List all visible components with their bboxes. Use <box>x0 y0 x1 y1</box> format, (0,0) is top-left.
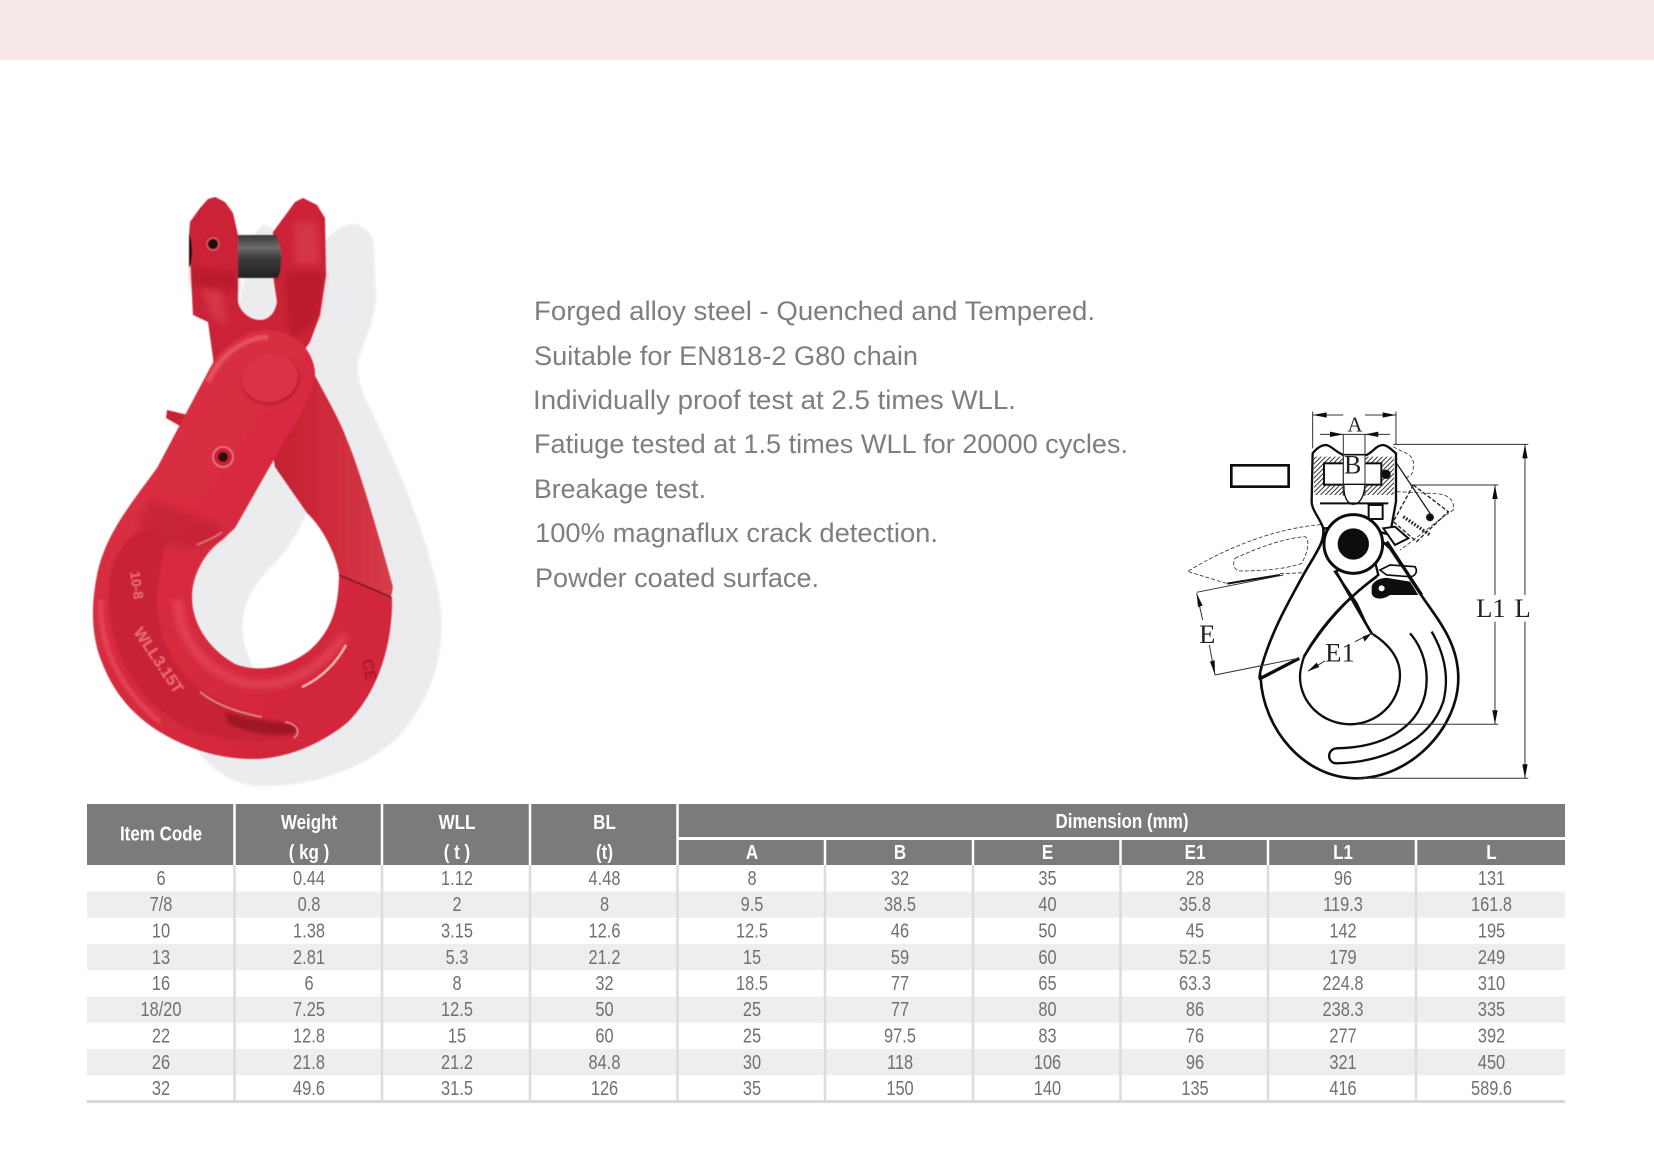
tilted lever hatching <box>1393 463 1448 542</box>
hook outline <box>1260 528 1458 778</box>
groove rim highlight <box>200 692 298 738</box>
column: E: 140 <box>1034 1076 1061 1099</box>
column: B: 77 <box>891 997 909 1020</box>
column: Item Code: 6 <box>156 866 166 889</box>
hook groove <box>109 529 298 741</box>
column: WLL: 2 <box>452 892 462 915</box>
clevis shade <box>191 268 325 340</box>
column: L: 450 <box>1478 1050 1505 1073</box>
column: L1: 277 <box>1329 1024 1357 1047</box>
feature list: Powder coated surface. <box>535 563 819 593</box>
column: BL: 21.2 <box>589 945 620 968</box>
column: Item Code: 7/8 <box>150 892 172 915</box>
technical line drawing with dimensions <box>1188 412 1531 778</box>
column: Item Code: 22 <box>152 1024 170 1047</box>
link set screw <box>213 447 233 467</box>
column: B: 32 <box>891 866 909 889</box>
dimension L1 <box>1357 485 1506 724</box>
clevis fork outline <box>1312 445 1396 535</box>
column: E: 40 <box>1038 892 1057 915</box>
column: WLL <box>441 866 473 1099</box>
column: Weight: 2.81 <box>293 945 325 968</box>
column: A: 9.5 <box>741 892 763 915</box>
feature list: Forged alloy steel - Quenched and Tempered. <box>534 296 1095 326</box>
clevis slot and hatching <box>1314 455 1394 519</box>
header labels: (t) <box>596 841 613 863</box>
dimension L1: L1 <box>1476 593 1506 623</box>
column: B: 118 <box>887 1050 913 1073</box>
clevis side hole <box>189 234 192 268</box>
column: A: 25 <box>743 997 761 1020</box>
column: A: 30 <box>743 1050 761 1073</box>
dimension A: A <box>1348 415 1363 437</box>
column: E: 50 <box>1038 919 1057 942</box>
column: A: 18.5 <box>736 971 768 994</box>
embossed marking: WLL3.15T <box>130 625 186 697</box>
column: L1: 119.3 <box>1323 892 1363 915</box>
header labels: Dimension (mm) <box>1055 810 1189 832</box>
column: WLL: 31.5 <box>441 1076 473 1099</box>
column: BL: 84.8 <box>589 1050 620 1073</box>
table bottom rule <box>87 1100 1565 1103</box>
column: A: 15 <box>743 945 761 968</box>
clevis pin hole <box>207 238 219 250</box>
column: WLL: 15 <box>448 1024 466 1047</box>
column: L1: 96 <box>1334 866 1352 889</box>
header labels: BL <box>593 811 616 833</box>
feature list <box>533 296 1128 593</box>
column: Item Code: 18/20 <box>141 997 181 1020</box>
column: E1: 45 <box>1186 919 1204 942</box>
column: E1: 52.5 <box>1179 945 1211 968</box>
column: Item Code: 10 <box>152 919 170 942</box>
feature list: Suitable for EN818-2 G80 chain <box>534 341 918 371</box>
column: Weight: 49.6 <box>293 1076 325 1099</box>
latch arm <box>270 370 393 597</box>
column: Weight: 6 <box>304 971 314 994</box>
column: L: 249 <box>1478 945 1505 968</box>
body column separators <box>234 865 1416 1100</box>
table header background <box>87 804 1565 865</box>
column: E1: 96 <box>1186 1050 1204 1073</box>
column: E1: 28 <box>1186 866 1204 889</box>
steel pin <box>238 235 281 278</box>
header labels: WLL <box>439 811 475 833</box>
column: E1 <box>1179 866 1211 1099</box>
header labels: ( kg ) <box>289 841 329 863</box>
clevis fork <box>189 197 326 370</box>
dimension B <box>1320 432 1390 495</box>
gloss streak <box>302 645 346 687</box>
column: BL: 50 <box>595 997 614 1020</box>
column: Weight: 21.8 <box>293 1050 325 1073</box>
dimension E: E <box>1199 619 1215 649</box>
column: BL: 4.48 <box>589 866 620 889</box>
header labels: B <box>894 841 906 863</box>
column: L: 392 <box>1478 1024 1505 1047</box>
column: A: 25 <box>743 1024 761 1047</box>
product photo: red clevis safety hook with shadow <box>93 197 442 786</box>
column: E <box>1034 866 1061 1099</box>
column: E1: 135 <box>1181 1076 1209 1099</box>
column: Item Code: 13 <box>152 945 170 968</box>
latch pawl mechanism <box>1372 527 1422 599</box>
column: BL: 126 <box>591 1076 618 1099</box>
column: A: 12.5 <box>736 919 768 942</box>
column: E: 35 <box>1038 866 1057 889</box>
link pivot cap <box>238 349 302 407</box>
latch split line <box>1261 658 1299 678</box>
column: E: 65 <box>1038 971 1057 994</box>
column: L1: 321 <box>1329 1050 1357 1073</box>
link pivot cap shadow <box>237 350 305 410</box>
latch trigger tab <box>166 410 188 426</box>
column: WLL: 1.12 <box>441 866 473 889</box>
column: B: 77 <box>891 971 909 994</box>
link shoulder shade <box>138 500 224 550</box>
column: E1: 35.8 <box>1179 892 1211 915</box>
column: L <box>1471 866 1512 1099</box>
column: B: 59 <box>891 945 909 968</box>
hook shadow <box>190 224 442 786</box>
column: E: 106 <box>1034 1050 1061 1073</box>
column: Weight: 1.38 <box>293 919 325 942</box>
column: L: 131 <box>1478 866 1505 889</box>
column: L1 <box>1323 866 1363 1099</box>
embossed marking: 10-8 <box>127 570 147 600</box>
dimension E1: E1 <box>1325 638 1355 668</box>
column: Weight: 0.8 <box>298 892 320 915</box>
column: E1: 63.3 <box>1179 971 1211 994</box>
column: E: 80 <box>1038 997 1057 1020</box>
feature list: Breakage test. <box>534 474 706 504</box>
header labels: E1 <box>1185 841 1205 863</box>
hook inner highlight band <box>178 600 345 684</box>
column: Weight: 12.8 <box>293 1024 325 1047</box>
outer rim highlight <box>101 600 160 722</box>
header labels: A <box>746 841 758 863</box>
latch seam <box>339 575 391 597</box>
column: BL: 60 <box>595 1024 614 1047</box>
column: WLL: 12.5 <box>441 997 473 1020</box>
column: B: 97.5 <box>884 1024 916 1047</box>
dimension B: B <box>1344 451 1361 480</box>
dimension A <box>1313 412 1396 448</box>
header labels: Item Code <box>120 822 202 845</box>
header labels <box>120 810 1497 863</box>
alternating row stripes <box>87 892 1565 1075</box>
column: A: 35 <box>743 1076 761 1099</box>
header labels: E <box>1042 841 1053 863</box>
column: BL <box>589 866 620 1099</box>
embossed marking <box>127 570 379 697</box>
clevis highlight <box>200 222 320 325</box>
groove dark slot <box>225 712 297 735</box>
column: Weight: 7.25 <box>293 997 325 1020</box>
red hook parts <box>93 197 393 759</box>
column: Item Code: 16 <box>152 971 170 994</box>
hook throat <box>1300 555 1400 724</box>
column: Item Code: 32 <box>152 1076 170 1099</box>
header labels: Weight <box>281 811 337 833</box>
column: BL: 8 <box>600 892 609 915</box>
column: BL: 32 <box>595 971 614 994</box>
latch solid edge <box>1227 575 1280 584</box>
header labels: ( t ) <box>444 841 470 863</box>
column: L1: 224.8 <box>1323 971 1363 994</box>
swivel pivot <box>1324 515 1383 573</box>
feature list: Fatiuge tested at 1.5 times WLL for 20000 cycles. <box>534 429 1128 459</box>
column: L: 195 <box>1478 919 1505 942</box>
shoulder gloss <box>197 532 222 545</box>
column: WLL: 8 <box>452 971 462 994</box>
column: L1: 416 <box>1329 1076 1357 1099</box>
column: A <box>736 866 768 1099</box>
dimension L <box>1357 444 1531 778</box>
dimension E <box>1197 575 1298 675</box>
feature list: 100% magnaflux crack detection. <box>535 518 938 548</box>
column: WLL: 5.3 <box>446 945 468 968</box>
column: B <box>884 866 916 1099</box>
column: BL: 12.6 <box>589 919 620 942</box>
column: B: 150 <box>886 1076 914 1099</box>
column: A: 8 <box>747 866 757 889</box>
top band <box>0 0 1654 60</box>
column: L: 335 <box>1478 997 1505 1020</box>
column: Weight: 0.44 <box>293 866 325 889</box>
dashed open latch <box>1188 447 1454 608</box>
column: L: 310 <box>1478 971 1505 994</box>
chain link cross-section <box>1231 465 1289 487</box>
column: B: 38.5 <box>884 892 916 915</box>
column: L1: 142 <box>1329 919 1357 942</box>
column: E1: 76 <box>1186 1024 1204 1047</box>
hook groove slot <box>1329 632 1446 763</box>
dimension L: L <box>1514 593 1531 623</box>
column: Weight <box>293 866 325 1099</box>
feature list: Individually proof test at 2.5 times WLL. <box>533 385 1016 415</box>
column: L1: 179 <box>1329 945 1357 968</box>
column: E: 60 <box>1038 945 1057 968</box>
dimension E1 <box>1307 633 1372 672</box>
column: Item Code <box>141 866 181 1099</box>
column: E1: 86 <box>1186 997 1204 1020</box>
column: L1: 238.3 <box>1323 997 1363 1020</box>
latch crossing lines <box>1304 572 1377 657</box>
link top highlight <box>208 337 268 382</box>
column: L: 161.8 <box>1471 892 1512 915</box>
hook body and side link <box>93 330 392 759</box>
embossed marking: CE <box>358 658 379 683</box>
specification table <box>87 804 1565 1103</box>
header labels: L <box>1486 841 1497 863</box>
header labels: L1 <box>1333 841 1353 863</box>
column: WLL: 3.15 <box>441 919 473 942</box>
column: Item Code: 26 <box>152 1050 170 1073</box>
column: B: 46 <box>891 919 909 942</box>
column: WLL: 21.2 <box>441 1050 473 1073</box>
column: E: 83 <box>1038 1024 1057 1047</box>
column: L: 589.6 <box>1471 1076 1512 1099</box>
